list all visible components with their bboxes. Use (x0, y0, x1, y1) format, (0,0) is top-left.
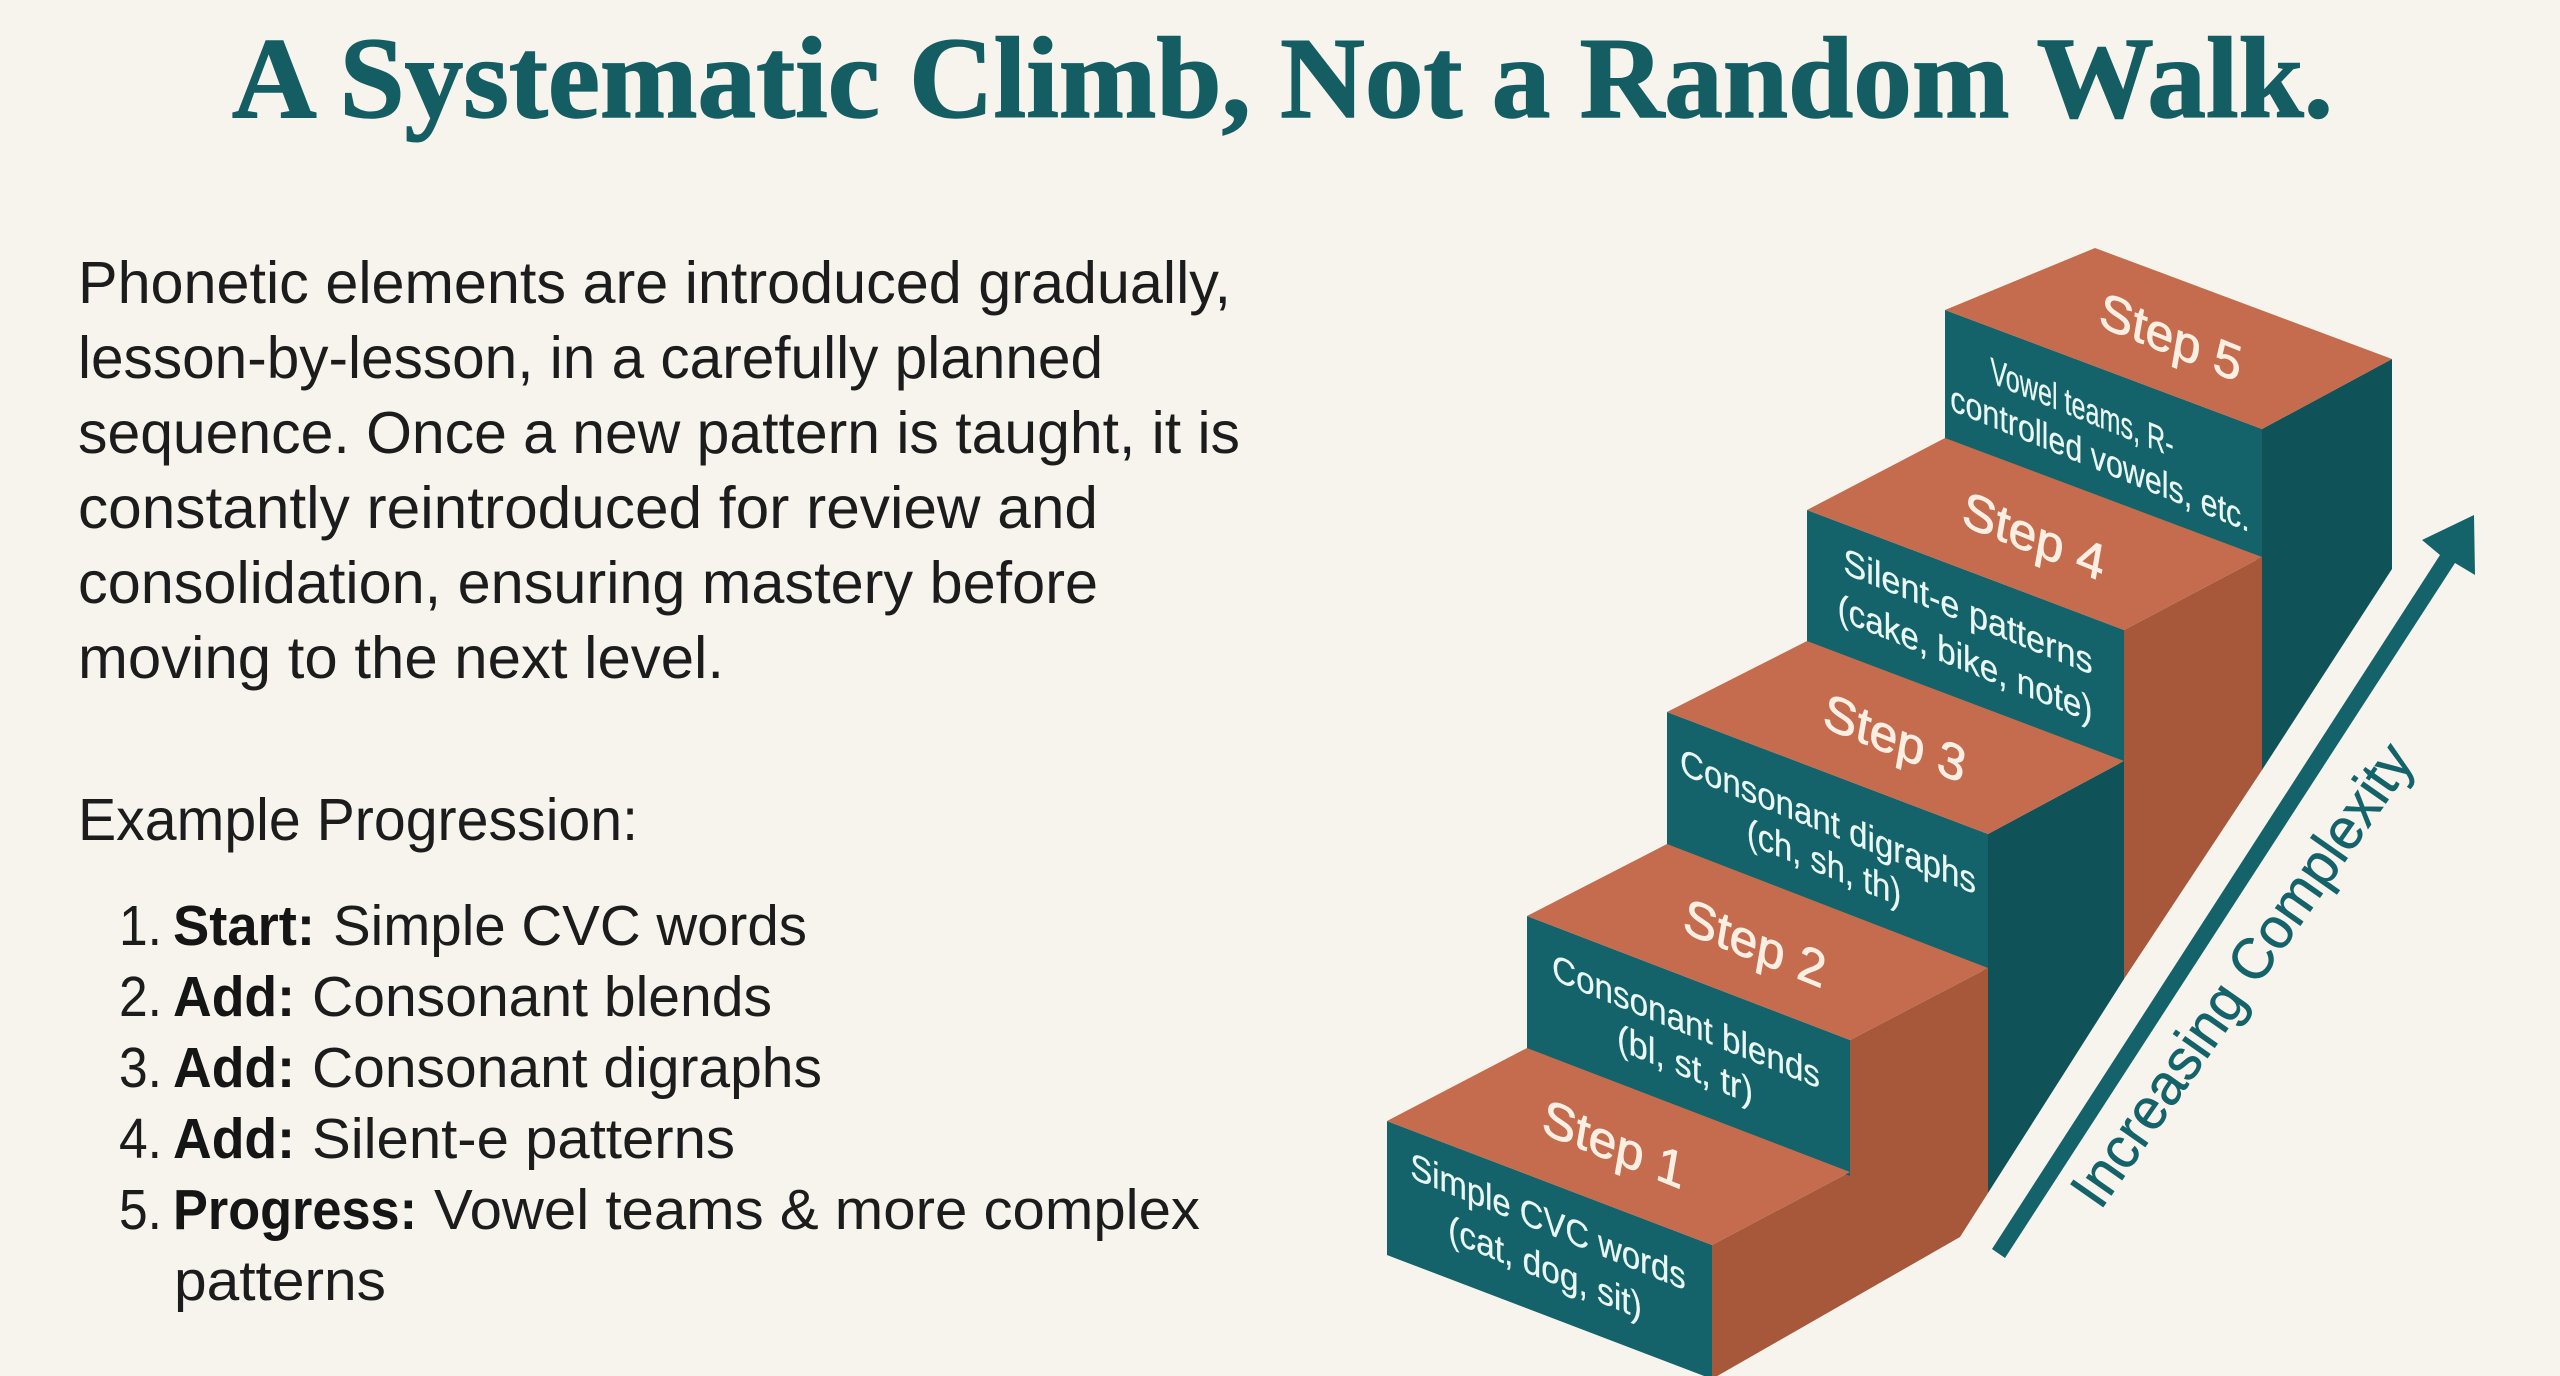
step 3 block: (ch, sh, th) (1747, 810, 1901, 915)
text block: intro paragraph (78, 250, 1240, 691)
step 4 block: Silent-e patterns (1843, 539, 2093, 683)
step 1 block: Step 1 (1539, 1088, 1689, 1200)
numbered list: progression: Silent-e patterns (312, 1107, 735, 1171)
step 4 block: (cake, bike, note) (1838, 585, 2092, 731)
numbered list: progression: 4. (119, 1107, 162, 1171)
title: A Systematic Climb, Not a Random Walk. (232, 15, 2333, 143)
numbered list: progression: Simple CVC words (333, 894, 807, 958)
step 5 block: Step 5 (2096, 281, 2246, 393)
step 5 block: Vowel teams, R- (1990, 349, 2174, 465)
heading: example progression: Example Progression: (78, 787, 638, 853)
step 5 block: controlled vowels, etc. (1950, 376, 2250, 540)
text block: intro paragraph: sequence. Once a new pattern is taught, it is (78, 400, 1240, 466)
step 3 block (1667, 641, 2124, 1193)
step 2 block (1527, 844, 1988, 1176)
step 4 block (1807, 438, 2262, 979)
text block: intro paragraph: consolidation, ensuring mastery before (78, 550, 1098, 616)
step 3 block: Step 3 (1820, 682, 1970, 794)
numbered list: progression: Add: (173, 1036, 295, 1100)
step 2 block: Step 2 (1680, 887, 1830, 999)
text block: intro paragraph: lesson-by-lesson, in a carefully planned (78, 325, 1103, 391)
text block: intro paragraph: Phonetic elements are introduced gradually, (78, 250, 1231, 316)
arrow: increasing complexity (1992, 515, 2475, 1258)
numbered list: progression: patterns (174, 1249, 386, 1313)
step 2 block: Consonant blends (1552, 945, 1820, 1097)
numbered list: progression: Start: (173, 894, 315, 958)
numbered list: progression (119, 894, 1200, 1313)
text block: intro paragraph: constantly reintroduced for review and (78, 475, 1098, 541)
step 3 block: Consonant digraphs (1680, 740, 1976, 902)
step 2 and step 1 side wall (1712, 968, 1988, 1376)
numbered list: progression: 5. (119, 1178, 162, 1242)
numbered list: progression: 2. (119, 965, 162, 1029)
numbered list: progression: Consonant digraphs (312, 1036, 822, 1100)
step 1 block: Simple CVC words (1410, 1144, 1686, 1298)
step 5 block (1945, 248, 2392, 770)
numbered list: progression: Progress: (173, 1178, 417, 1242)
numbered list: progression: Add: (173, 965, 295, 1029)
step 4 block: Step 4 (1959, 480, 2109, 592)
step 1 block: (cat, dog, sit) (1448, 1207, 1642, 1328)
numbered list: progression: 3. (119, 1036, 162, 1100)
arrow label: Increasing Complexity (2058, 731, 2426, 1219)
staircase diagram (1387, 248, 2392, 1376)
numbered list: progression: Vowel teams & more complex (434, 1178, 1200, 1242)
text block: intro paragraph: moving to the next level. (78, 625, 724, 691)
numbered list: progression: Add: (173, 1107, 295, 1171)
numbered list: progression: Consonant blends (312, 965, 772, 1029)
numbered list: progression: 1. (119, 894, 162, 958)
step 1 block (1387, 1048, 1850, 1376)
step 2 block: (bl, st, tr) (1617, 1015, 1753, 1113)
